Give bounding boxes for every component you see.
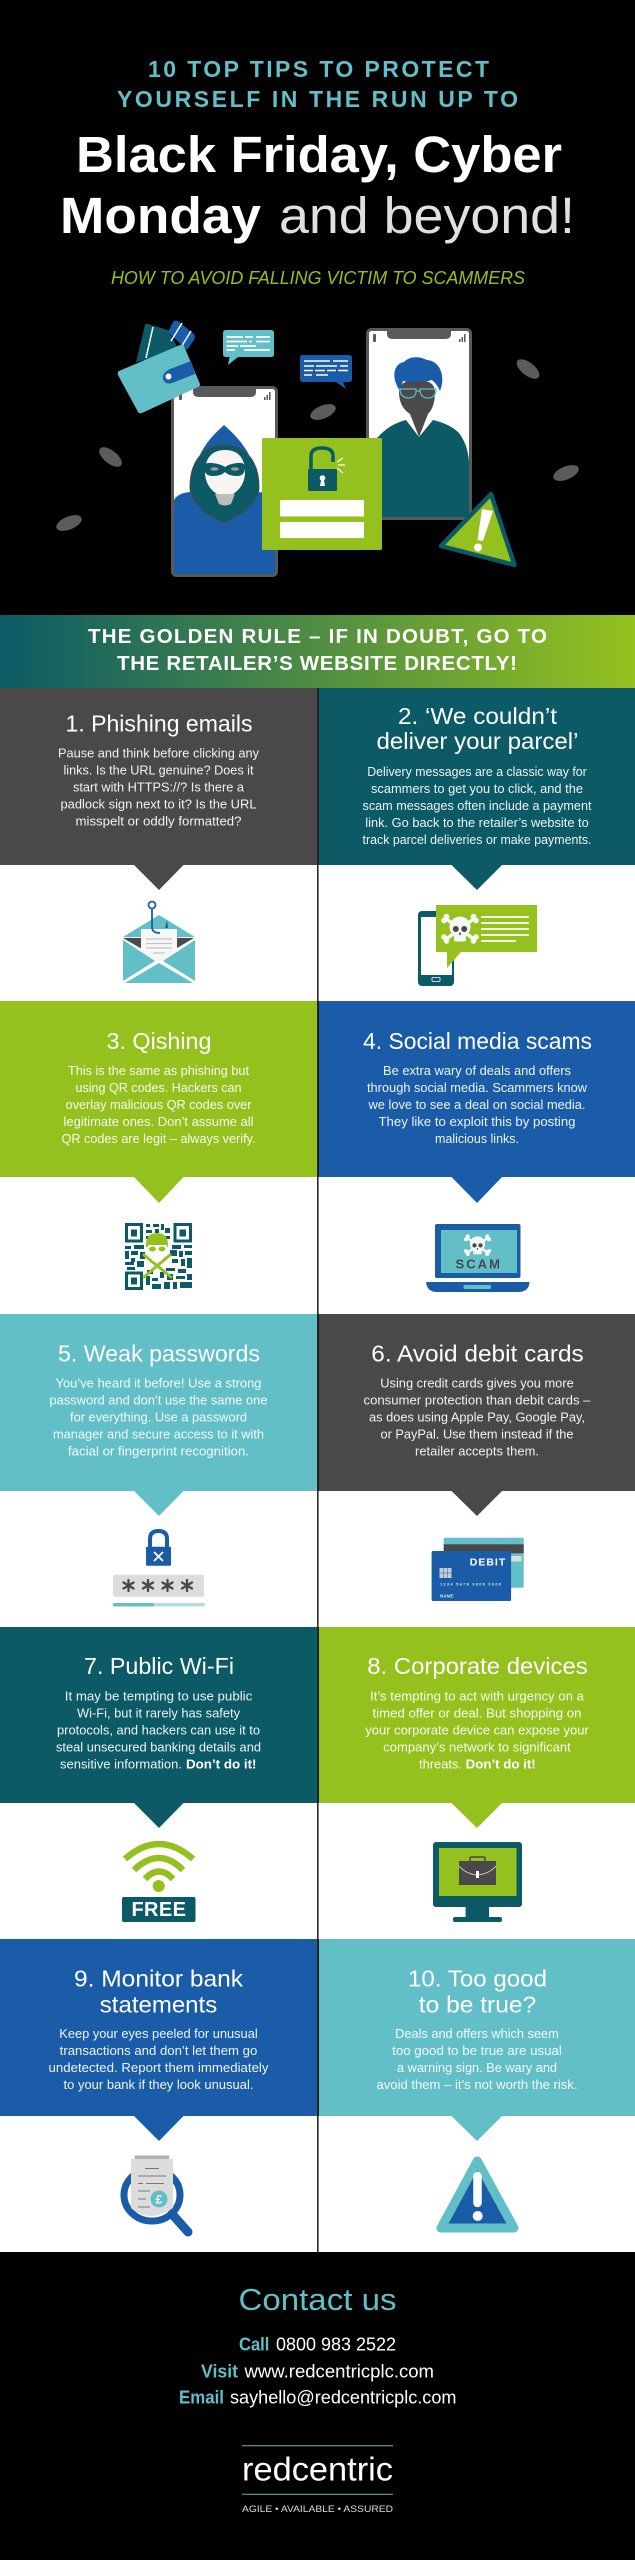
main title — [60, 126, 575, 244]
panel 9 — [0, 1939, 317, 2141]
heading: 10 top tips: YOURSELF IN THE RUN UP TO — [117, 86, 518, 112]
panel 5 text: manager and secure access to it with — [53, 1428, 264, 1442]
panel 7 text — [56, 1689, 261, 1771]
panel 6 text: retailer accepts them. — [415, 1445, 539, 1459]
left phone: hacker — [172, 388, 276, 576]
redcentric logo: AGILE • AVAILABLE • ASSURED — [242, 2504, 393, 2515]
panel 8 — [319, 1627, 635, 1828]
icon: debit cards: NAME — [440, 1594, 454, 1599]
panel 10 — [319, 1939, 635, 2141]
icon: debit cards: DEBIT — [470, 1557, 506, 1569]
panel 10 text: avoid them – it’s not worth the risk. — [376, 2078, 578, 2092]
panel 4 text: we love to see a deal on social media. — [367, 1098, 586, 1112]
panel 7 text: Don’t do it! — [186, 1757, 256, 1771]
tip 6: avoid debit cards — [319, 1314, 635, 1601]
panel 8 text: timed offer or deal. But shopping on — [372, 1706, 582, 1720]
redcentric logo — [242, 2445, 393, 2515]
main title: and beyond! — [279, 187, 575, 244]
panel 8 heading: 8. Corporate devices — [367, 1653, 588, 1679]
panel 2 text: track parcel deliveries or make payments. — [362, 833, 592, 847]
panel 7 text: protocols, and hackers can use it to — [57, 1723, 260, 1737]
floating coins — [54, 356, 581, 534]
panel 9 text: Keep your eyes peeled for unusual — [59, 2027, 258, 2041]
panel 1 heading: 1. Phishing emails — [66, 711, 253, 737]
wallet and cards — [118, 320, 200, 413]
warning triangle — [441, 494, 514, 565]
panel 2 text: scammers to get you to click, and the — [371, 782, 583, 796]
golden rule band — [0, 615, 635, 688]
panel 5 text: password and don’t use the same one — [50, 1394, 268, 1408]
contact details: sayhello@redcentricplc.com — [230, 2387, 456, 2407]
heading: 10 top tips — [117, 56, 518, 112]
panel 10 heading — [408, 1966, 547, 2017]
panel 9 heading: 9. Monitor bank — [74, 1966, 244, 1992]
panel 9 heading — [74, 1966, 244, 2017]
panel 3 — [0, 1001, 317, 1203]
panel 8 text: Don’t do it! — [466, 1757, 536, 1771]
contact details: Call — [239, 2335, 269, 2355]
panel 1 text: links. Is the URL genuine? Does it — [64, 764, 254, 778]
green login card with open padlock — [262, 438, 382, 550]
heading: 10 top tips: 10 TOP TIPS TO PROTECT — [148, 56, 489, 82]
panel 10 text: Deals and offers which seem — [395, 2027, 559, 2041]
icon: malicious QR code — [125, 1224, 192, 1289]
tip 3: qishing — [0, 1001, 317, 1289]
panel 9 text: undetected. Report them immediately — [48, 2061, 269, 2075]
golden rule band: THE GOLDEN RULE – IF IN DOUBT, GO TO — [88, 625, 547, 648]
panel 5 text: You’ve heard it before! Use a strong — [56, 1377, 262, 1391]
panel 7 text: It may be tempting to use public — [65, 1689, 252, 1703]
panel 6 — [319, 1314, 635, 1516]
panel 8 text: your corporate device can expose your — [365, 1723, 589, 1737]
panel 2 text — [362, 765, 592, 847]
panel 7 — [0, 1627, 317, 1828]
panel 9 heading: statements — [100, 1991, 217, 2017]
panel 3 text: overlay malicious QR codes over — [66, 1098, 252, 1112]
white icon rows — [0, 865, 635, 1001]
golden rule band: THE RETAILER’S WEBSITE DIRECTLY! — [117, 652, 517, 675]
tip 4: social media scams — [319, 1001, 635, 1292]
panel 8 text: It’s tempting to act with urgency on a — [370, 1689, 584, 1703]
icon: debit cards — [432, 1538, 524, 1601]
panel 4 text — [367, 1064, 588, 1146]
panel 8 text: company’s network to significant — [383, 1740, 571, 1754]
panel 10 text — [376, 2027, 578, 2092]
panel 2 text: Delivery messages are a classic way for — [367, 765, 587, 779]
panel 2 text: link. Go back to the retailer’s website to — [365, 816, 589, 830]
tip 10: too good to be true — [319, 1939, 635, 2228]
panel 4 text: Be extra wary of deals and offers — [383, 1064, 571, 1078]
panel 2 heading: deliver your parcel’ — [376, 728, 578, 754]
panel 7 text: Wi-Fi, but it rarely has safety — [77, 1706, 241, 1720]
tip 2: we couldn't deliver your parcel — [319, 688, 635, 986]
panel 8 text: threats. — [419, 1757, 462, 1771]
contact section — [179, 2282, 456, 2515]
panel 4 heading: 4. Social media scams — [363, 1028, 592, 1054]
main title: Black Friday, Cyber — [76, 126, 562, 183]
header: titles — [60, 56, 575, 288]
panel 6 text: as does using Apple Pay, Google Pay, — [369, 1411, 585, 1425]
panel 5 text: facial or fingerprint recognition. — [68, 1445, 249, 1459]
panel 6 text: Using credit cards gives you more — [380, 1377, 574, 1391]
panel 2 — [319, 688, 635, 890]
main title: Monday — [60, 187, 262, 244]
contact details: www.redcentricplc.com — [243, 2361, 434, 2381]
panel 9 text: to your bank if they look unusual. — [64, 2078, 254, 2092]
panel 1 text: padlock sign next to it? Is the URL — [60, 798, 257, 812]
tip 9: monitor bank statements — [0, 1939, 317, 2232]
icon: free wi-fi: FREE — [131, 1899, 186, 1921]
tip 7: public wi-fi — [0, 1627, 317, 1922]
panel 5 text: for everything. Use a password — [70, 1411, 247, 1425]
panel 10 text: too good to be true are usual — [392, 2044, 562, 2058]
subtitle: HOW TO AVOID FALLING VICTIM TO SCAMMERS — [111, 268, 525, 288]
hero illustration — [54, 320, 581, 576]
chat bubble: teal — [223, 330, 274, 365]
icon: statement under magnifier — [124, 2156, 188, 2232]
panel 6 text: consumer protection than debit cards – — [364, 1394, 591, 1408]
contact details: 0800 983 2522 — [276, 2335, 396, 2355]
contact details — [179, 2335, 456, 2407]
panel 10 text: a warning sign. Be wary and — [397, 2061, 557, 2075]
tip 5: weak passwords — [0, 1314, 317, 1606]
panel 7 text: steal unsecured banking details and — [56, 1740, 261, 1754]
contact heading: Contact us — [238, 2282, 396, 2317]
panel 6 text — [364, 1377, 591, 1459]
panel 5 — [0, 1314, 317, 1516]
panel 10 heading: 10. Too good — [408, 1966, 547, 1992]
panel 1 text: start with HTTPS://? Is there a — [73, 781, 244, 795]
icon: debit cards: 1234 5678 9000 0000 — [440, 1581, 502, 1586]
panel 2 heading — [376, 703, 578, 754]
icon: laptop with scam warning — [426, 1224, 530, 1292]
panel 3 text: legitimate ones. Don’t assume all — [64, 1115, 254, 1129]
redcentric logo: redcentric — [242, 2451, 393, 2488]
contact details: Email — [179, 2387, 224, 2407]
icon: statement under magnifier: £ — [156, 2192, 163, 2206]
icon: corporate monitor — [433, 1842, 522, 1922]
panel 1 text — [58, 747, 260, 829]
icon: scam text message — [418, 905, 537, 986]
chat bubble: blue — [300, 355, 352, 389]
panel 2 heading: 2. ‘We couldn’t — [398, 703, 558, 729]
right phone: victim — [368, 330, 470, 518]
panel 9 text: transactions and don’t let them go — [60, 2044, 257, 2058]
icon: free wi-fi — [122, 1844, 196, 1922]
panel 5 text — [50, 1377, 268, 1459]
panel 4 text: malicious links. — [435, 1132, 519, 1146]
panel 5 heading: 5. Weak passwords — [58, 1341, 260, 1367]
panel 7 text: sensitive information. — [60, 1757, 182, 1771]
panel 4 — [319, 1001, 635, 1203]
contact details: Visit — [201, 2361, 238, 2381]
tip 1: phishing emails — [0, 688, 317, 983]
panel 1 text: misspelt or oddly formatted? — [76, 815, 242, 829]
icon: phishing envelope — [123, 902, 195, 983]
panel 3 text: QR codes are legit – always verify. — [62, 1132, 256, 1146]
panel 3 heading: 3. Qishing — [106, 1028, 212, 1054]
panel 9 text — [48, 2027, 269, 2092]
panel 1 — [0, 688, 317, 890]
panel 4 text: through social media. Scammers know — [367, 1081, 588, 1095]
panel 3 text: This is the same as phishing but — [68, 1064, 250, 1078]
panel 3 text — [62, 1064, 256, 1146]
panel 6 heading: 6. Avoid debit cards — [371, 1341, 584, 1367]
panel 7 heading: 7. Public Wi-Fi — [84, 1653, 234, 1679]
panel 6 text: or PayPal. Use them instead if the — [380, 1428, 574, 1442]
tip 8: corporate devices — [319, 1627, 635, 1922]
panel 3 text: using QR codes. Hackers can — [76, 1081, 242, 1095]
icon: laptop with scam warning: SCAM — [455, 1257, 500, 1272]
icon: padlock and password field — [113, 1531, 205, 1606]
panel 8 text — [365, 1689, 589, 1771]
centre divider — [317, 688, 319, 2252]
icon: warning triangle — [441, 2161, 514, 2228]
panel 2 text: scam messages often include a payment — [362, 799, 592, 813]
panel 4 text: They like to exploit this by posting — [378, 1115, 576, 1129]
panel 10 heading: to be true? — [419, 1991, 536, 2017]
panel 1 text: Pause and think before clicking any — [58, 747, 260, 761]
